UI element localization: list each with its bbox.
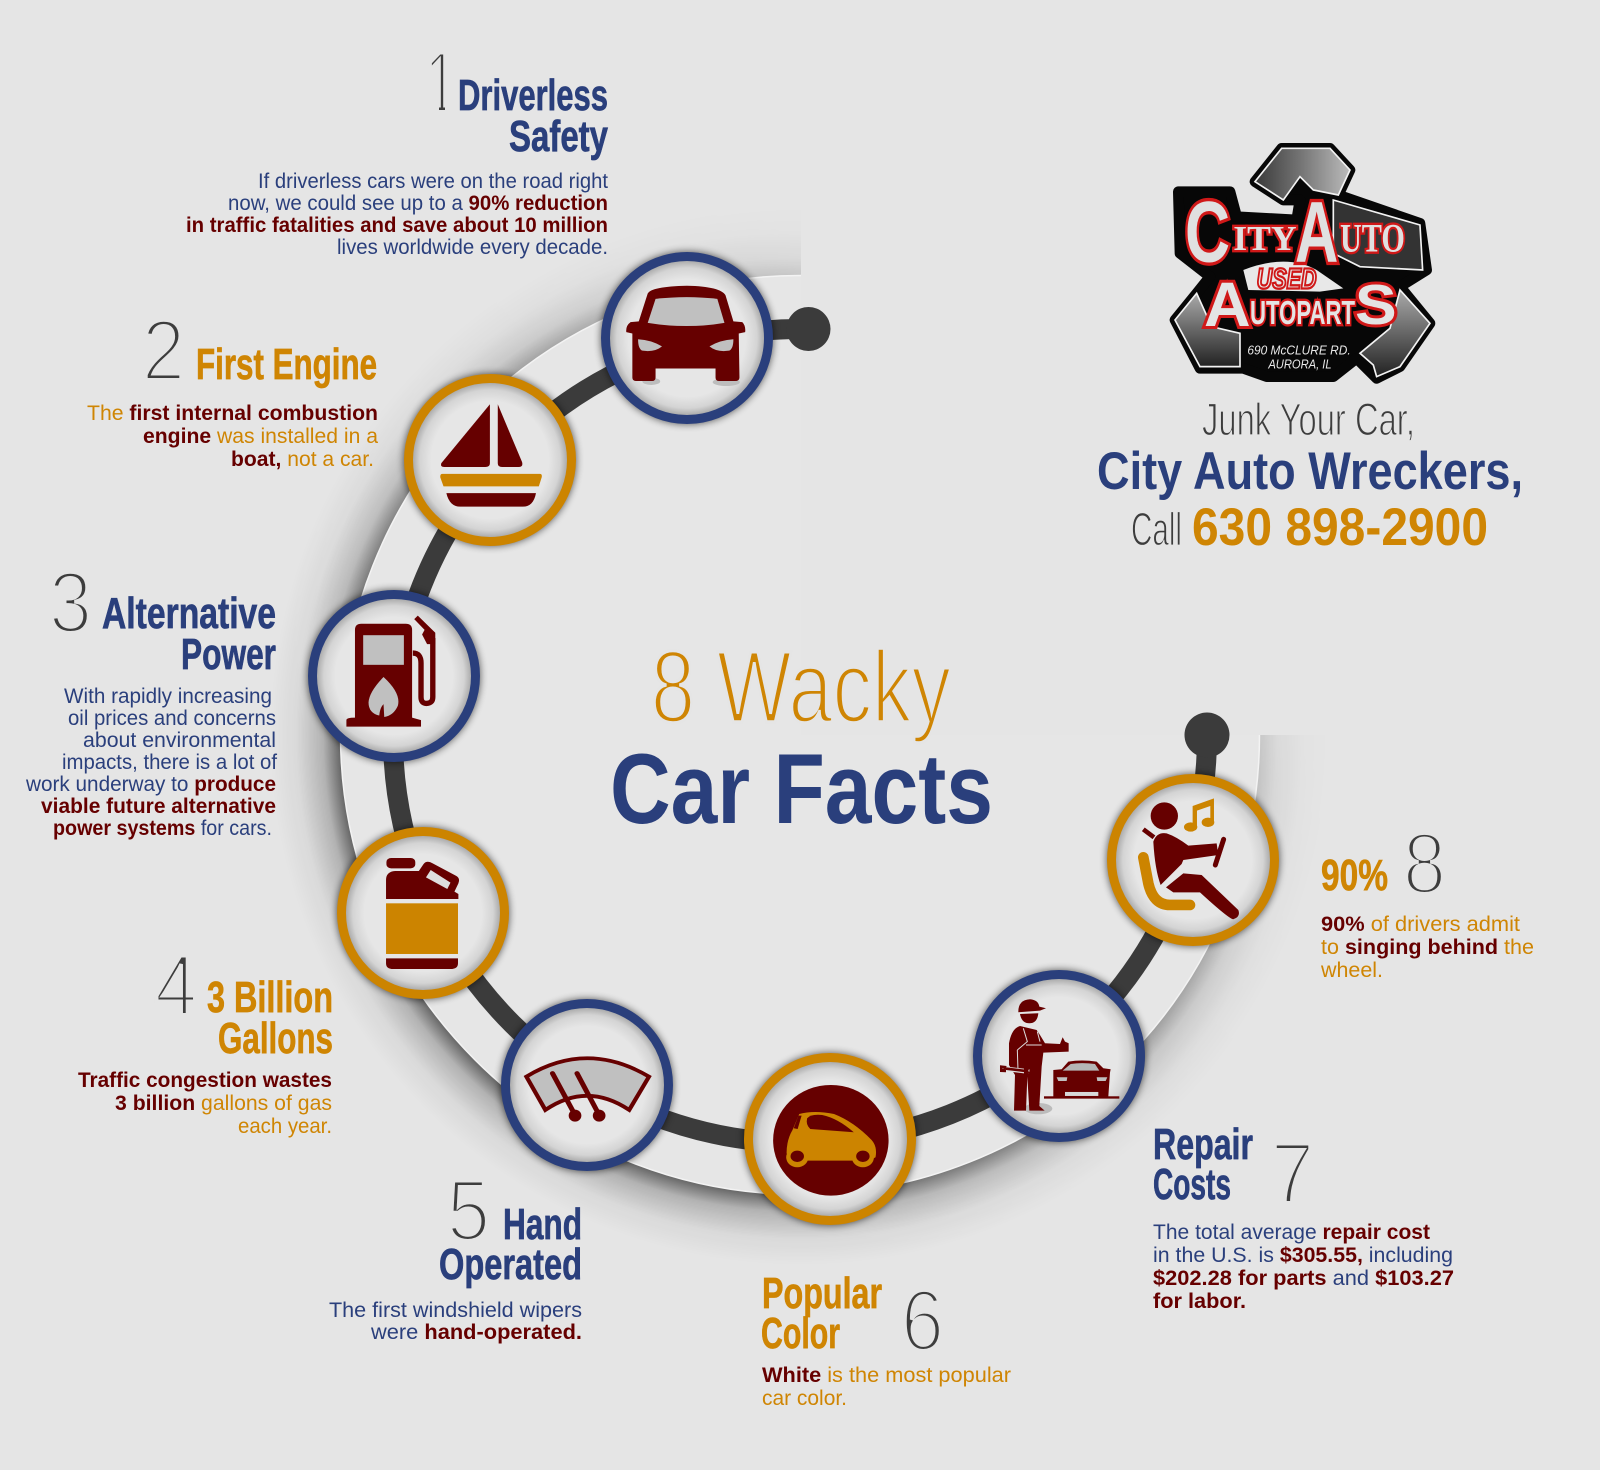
fact 7: repair costs: for labor. [1153,1290,1246,1313]
fact 2: first engine: engine was installed in a [143,425,378,448]
fact 1: driverless safety: Safety [509,112,608,161]
logo: City Auto Used Autoparts: UTO [1340,216,1405,261]
node 4: jerry can icon [337,827,509,999]
node 1: car icon [601,252,773,424]
logo: City Auto Used Autoparts: A [1295,185,1338,281]
fact 8: singing drivers [1320,816,1534,982]
main title: Car Facts [610,733,993,844]
fact 7: repair costs: 7 [1271,1126,1314,1222]
fact 1: driverless safety: Driverless [458,71,608,120]
fact 6: popular color: White is the most popular [762,1364,1011,1387]
node 2: sailboat icon [404,374,576,546]
fact 8: singing drivers: 90% [1321,851,1388,900]
fact 8: singing drivers: to singing behind the [1321,936,1534,959]
background disc with shadow [288,247,1288,1248]
logo: City Auto Used Autoparts: UTOPART [1250,295,1355,332]
logo: City Auto Used Autoparts: C [1185,185,1230,281]
node 5: windshield wiper icon [501,999,673,1171]
fact 7: repair costs: $202.28 for parts and $103.27 [1153,1267,1454,1290]
fact 3: alternative power: power systems for cars. [53,817,272,840]
fact 2: first engine [87,303,378,471]
fact 5: hand operated [329,1163,582,1344]
fact 3: alternative power [25,555,277,840]
fact 4: 3 billion gallons: Traffic congestion wastes [78,1069,332,1092]
fact 7: repair costs: The total average repair cost [1153,1221,1430,1244]
fact 1: driverless safety: lives worldwide every decade. [337,236,608,259]
node 6: small car icon [744,1053,916,1225]
fact 4: 3 billion gallons [78,938,333,1138]
fact 4: 3 billion gallons: Gallons [218,1014,333,1063]
fact 1: driverless safety: now, we could see up to a 90% reduction [228,192,608,215]
fact 1: driverless safety: 1 [425,35,457,131]
fact 4: 3 billion gallons: 3 billion gallons of gas [115,1092,332,1115]
fact 3: alternative power: viable future alternative [41,795,276,818]
fact 2: first engine: 2 [142,303,185,399]
fact 4: 3 billion gallons: each year. [238,1115,332,1138]
logo: City Auto Used Autoparts: A [1204,270,1251,340]
fact 3: alternative power: oil prices and concerns [68,707,276,730]
main title: 8 Wacky [651,630,951,744]
logo: City Auto Used Autoparts: S [1355,274,1397,337]
fact 5: hand operated: Operated [439,1240,582,1289]
logo: City Auto Used Autoparts: AURORA, IL [1267,358,1332,372]
fact 3: alternative power: With rapidly increasing [64,685,272,708]
fact 5: hand operated: 5 [447,1163,490,1259]
fact 3: alternative power: Alternative [102,589,276,638]
fact 8: singing drivers: 8 [1403,816,1446,912]
fact 3: alternative power: 3 [49,555,92,651]
node 7: mechanic icon [973,970,1145,1142]
fact 7: repair costs: Repair [1153,1120,1253,1169]
fact 3: alternative power: about environmental [83,729,276,752]
call to action text: Junk Your Car, [1202,394,1415,445]
fact 2: first engine: boat, not a car. [231,448,374,471]
call to action text [1097,394,1523,557]
fact 7: repair costs: in the U.S. is $305.55, including [1153,1244,1453,1267]
fact 8: singing drivers: 90% of drivers admit [1321,913,1520,936]
logo: City Auto Used Autoparts: USED [1257,263,1317,295]
fact 2: first engine: The first internal combustion [87,402,378,425]
fact 6: popular color [761,1269,1011,1410]
fact 6: popular color: Color [761,1309,840,1358]
fact 7: repair costs [1153,1120,1454,1313]
fact 4: 3 billion gallons: 4 [155,938,197,1034]
node 3: fuel pump icon [308,590,480,762]
fact 8: singing drivers: wheel. [1320,959,1383,982]
fact 6: popular color: Popular [762,1269,882,1318]
fact 6: popular color: 6 [901,1273,944,1369]
fact 1: driverless safety: If driverless cars were on the road right [258,170,608,193]
node 8: singing driver icon [1107,774,1279,946]
logo: City Auto Used Autoparts [1175,148,1430,378]
fact 6: popular color: car color. [762,1387,847,1410]
fact 1: driverless safety: in traffic fatalities and save about 10 million [186,214,608,237]
fact 5: hand operated: Hand [503,1200,582,1249]
fact 5: hand operated: The first windshield wipers [329,1299,582,1322]
logo: City Auto Used Autoparts: 690 McCLURE RD. [1247,344,1351,358]
call to action text: Call [1131,503,1182,555]
fact 3: alternative power: work underway to produce [25,773,276,796]
call to action text: 630 898-2900 [1192,498,1488,557]
circular track with end dots [393,307,1230,1143]
fact 2: first engine: First Engine [196,340,377,389]
main title [610,630,993,844]
call to action text: City Auto Wreckers, [1097,442,1523,501]
fact 4: 3 billion gallons: 3 Billion [207,973,333,1022]
fact 7: repair costs: Costs [1153,1160,1231,1209]
logo: City Auto Used Autoparts: ITY [1233,219,1297,258]
fact 1: driverless safety [186,35,608,259]
fact 3: alternative power: impacts, there is a lot of [62,751,277,774]
fact 3: alternative power: Power [181,630,276,679]
fact 5: hand operated: were hand-operated. [370,1321,582,1344]
